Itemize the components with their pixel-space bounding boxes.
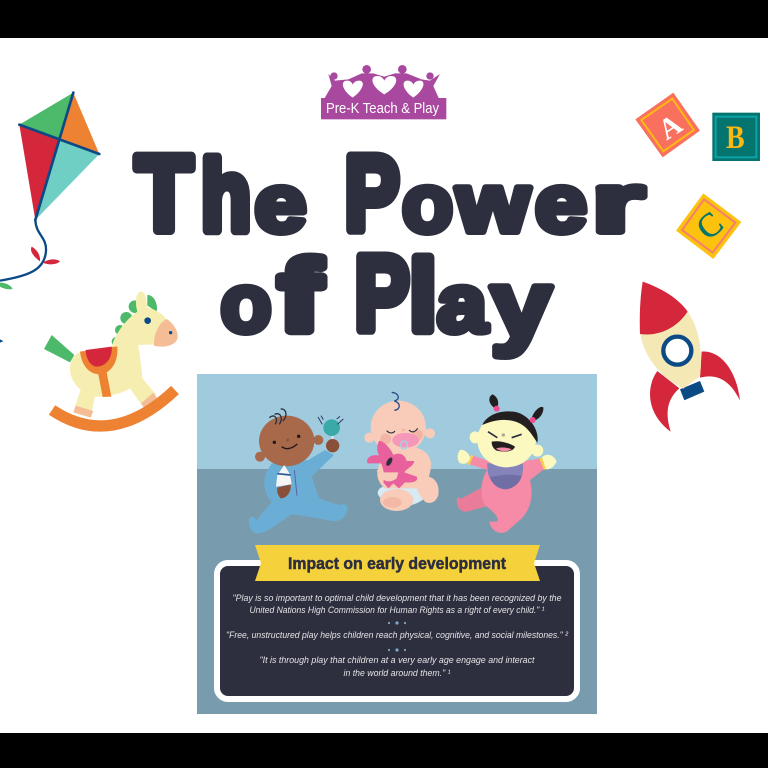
logo: Pre-K Teach & Play — [321, 65, 446, 119]
quote 2: "Free, unstructured play helps children reach physical, cognitive, and social milestones." ² — [226, 630, 569, 640]
title: The Power of Play: y — [490, 252, 552, 358]
icon: letter blocks — [635, 93, 760, 259]
quote 1: United Nations High Commission for Human Rights as a right of every child." ¹ — [250, 605, 544, 615]
title: The Power of Play: T — [136, 133, 192, 253]
quote 3: "It is through play that children at a very early age engage and interact — [260, 655, 535, 665]
banner: Impact on early development: Impact on early development — [288, 555, 506, 573]
horse tail — [44, 335, 74, 362]
logo wordmark: Pre-K Teach & Play — [326, 100, 439, 117]
block A — [635, 93, 700, 157]
block C — [676, 193, 741, 259]
title: The Power of Play: l — [410, 240, 436, 352]
title: The Power of Play: P — [344, 133, 400, 253]
quote 3: in the world around them." ¹ — [344, 668, 451, 678]
horse hooves — [73, 393, 157, 418]
title: The Power of Play: w — [455, 156, 530, 250]
panel floor background — [197, 469, 597, 714]
horse mane — [112, 295, 157, 346]
illustration: baby in blue suit with rattle — [249, 409, 347, 533]
horse body and head — [70, 292, 168, 412]
title: The Power of Play: o — [402, 156, 453, 250]
icon: rocking horse — [44, 292, 178, 426]
panel sky background — [197, 374, 597, 469]
icon: rocket — [640, 282, 740, 432]
title: The Power of Play: o — [220, 256, 272, 350]
title: The Power of Play: e — [254, 156, 306, 250]
title: The Power of Play: a — [437, 256, 488, 350]
quote 1: "Play is so important to optimal child development that it has been recognized by the — [232, 593, 562, 603]
block B: B — [726, 120, 745, 156]
quote 3 — [260, 655, 535, 678]
block C: C — [689, 205, 730, 247]
title: The Power of Play: r — [592, 156, 644, 250]
dots divider 2 — [388, 648, 406, 652]
horse rocker — [52, 390, 175, 426]
block A: A — [653, 108, 688, 147]
horse muzzle — [154, 319, 178, 347]
logo figures and hearts — [321, 65, 446, 119]
block B — [712, 113, 760, 161]
title: The Power of Play: e — [535, 156, 587, 250]
panel: early development — [197, 374, 597, 714]
horse saddle — [80, 346, 117, 397]
bottom black bar — [0, 733, 768, 768]
quote box — [217, 563, 577, 699]
icon: kite — [0, 93, 99, 343]
dots divider 1 — [388, 621, 406, 625]
quote 1 — [232, 593, 562, 615]
illustration: baby with pink bunny and pacifier — [364, 392, 439, 511]
title: The Power of Play: f — [279, 240, 322, 352]
title: The Power of Play: h — [201, 140, 251, 252]
title: The Power of Play — [136, 133, 644, 358]
illustration: baby in pink suit with bib — [457, 394, 557, 533]
top black bar — [0, 0, 768, 38]
banner: Impact on early development — [255, 545, 540, 581]
title: The Power of Play: P — [354, 233, 410, 353]
